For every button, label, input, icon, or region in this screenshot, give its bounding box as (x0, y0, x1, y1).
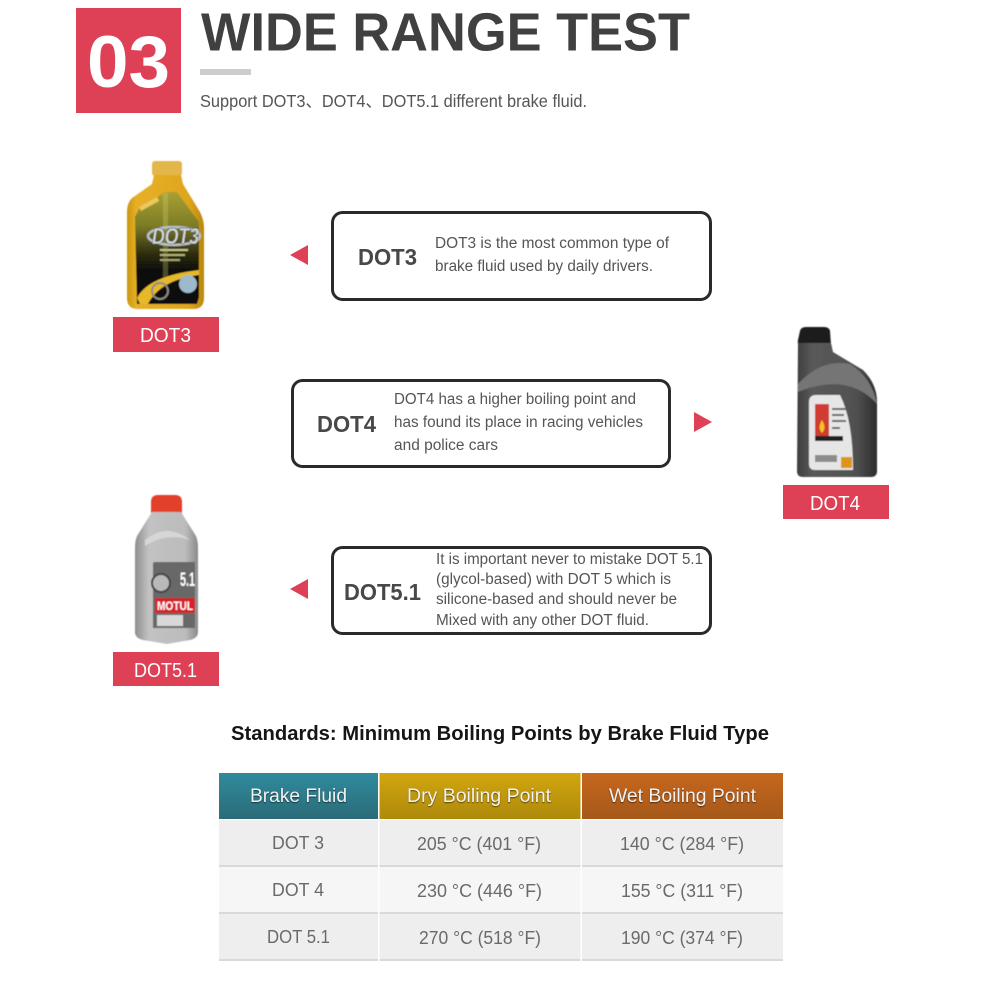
table heading: Standards: Minimum Boiling Points by Brake Fluid Type (231, 722, 769, 745)
panel: DOT3 description: DOT3 (358, 244, 417, 270)
panel: DOT3 description (332, 212, 710, 300)
table rows: 190 °C (374 °F) (621, 928, 743, 948)
icon: silver DOT5.1 bottle: 5.1 (180, 570, 195, 591)
table: boiling points (219, 773, 783, 961)
panel: DOT4 description: has found its place in racing vehicles (394, 414, 643, 431)
section number badge: 03 (87, 22, 170, 103)
panel: DOT4 description: DOT4 has a higher boiling point and (394, 391, 636, 408)
panel: DOT5.1 description: silicone-based and should never be (436, 591, 677, 608)
label: DOT4 (783, 485, 889, 519)
panel: DOT5.1 description: Mixed with any other DOT fluid. (436, 612, 649, 629)
panel: DOT4 description: DOT4 (317, 411, 376, 437)
table rows: DOT 4 (272, 880, 324, 900)
panel: DOT3 description: brake fluid used by daily drivers. (435, 258, 653, 275)
table rows: 230 °C (446 °F) (417, 881, 542, 901)
table header (219, 773, 783, 819)
arrow: left to DOT3 (290, 245, 308, 265)
panel: DOT5.1 description: It is important never to mistake DOT 5.1 (436, 551, 703, 568)
table rows: 205 °C (401 °F) (417, 834, 541, 854)
icon: dark DOT4 bottle (797, 327, 877, 477)
panel: DOT5.1 description: DOT5.1 (344, 579, 421, 605)
table rows: 155 °C (311 °F) (621, 881, 743, 901)
arrow: right to DOT4 (694, 412, 712, 432)
icon: silver DOT5.1 bottle: MOTUL (157, 599, 193, 613)
table rows (219, 820, 783, 961)
icon: silver DOT5.1 bottle (135, 495, 198, 644)
table header: Brake Fluid (250, 786, 347, 807)
arrow: left to DOT5.1 (290, 579, 308, 599)
label: DOT3 (113, 317, 219, 352)
label: DOT5.1 (113, 652, 219, 686)
label: DOT4: DOT4 (810, 492, 860, 515)
subtitle: Support DOT3、DOT4、DOT5.1 different brake fluid. (200, 91, 587, 111)
panel: DOT5.1 description: (glycol-based) with DOT 5 which is (436, 571, 671, 588)
table rows: DOT 3 (272, 833, 324, 853)
label: DOT5.1: DOT5.1 (134, 659, 197, 682)
panel: DOT4 description (292, 380, 670, 466)
icon: gold DOT3 bottle: DOT3 (152, 223, 199, 249)
table rows: DOT 5.1 (267, 927, 330, 947)
table header: Dry Boiling Point (407, 786, 552, 807)
icon: gold DOT3 bottle (127, 161, 204, 309)
table header: Wet Boiling Point (609, 786, 757, 807)
title: WIDE RANGE TEST (201, 2, 690, 62)
panel: DOT5.1 description (332, 548, 710, 634)
panel: DOT4 description: and police cars (394, 437, 498, 454)
panel: DOT3 description: DOT3 is the most common type of (435, 235, 670, 252)
section number badge (76, 8, 181, 113)
table rows: 270 °C (518 °F) (419, 928, 541, 948)
table rows: 140 °C (284 °F) (620, 834, 744, 854)
label: DOT3: DOT3 (140, 324, 191, 347)
